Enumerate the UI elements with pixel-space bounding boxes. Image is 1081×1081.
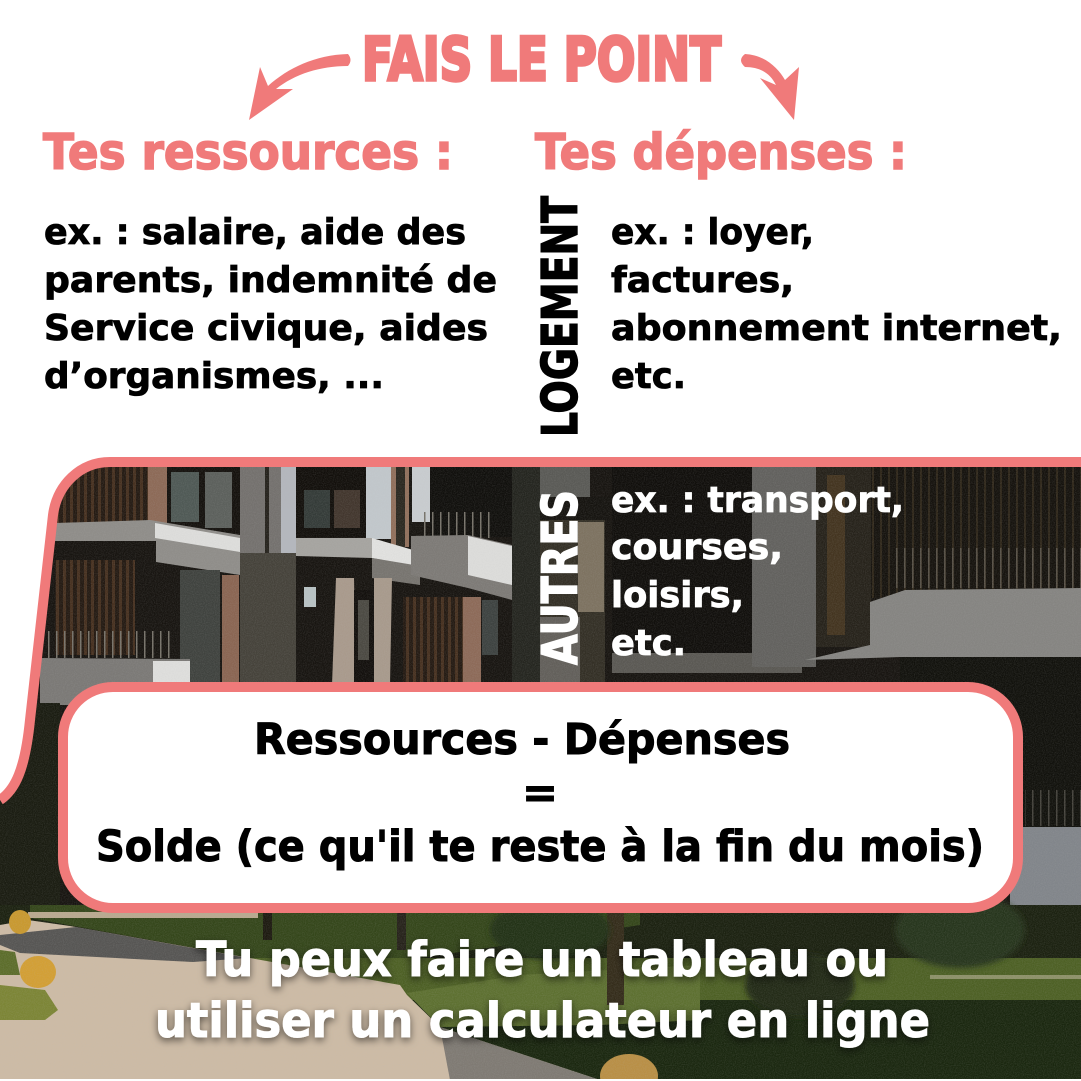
text block: housing examples: etc. xyxy=(611,356,686,397)
coral curved frame line above the photo xyxy=(0,462,1081,800)
text block: other expenses examples: etc. xyxy=(611,623,686,664)
heading: resources: Tes ressources : xyxy=(43,124,453,181)
left facade xyxy=(40,467,540,705)
closing text xyxy=(155,932,930,1049)
text block: resources examples: d’organismes, ... xyxy=(44,356,384,397)
background photo: apartment buildings and garden xyxy=(0,460,1081,1081)
text block: resources examples: ex. : salaire, aide des xyxy=(44,212,466,253)
equals sign: = xyxy=(522,768,558,818)
heading: expenses: Tes dépenses : xyxy=(535,124,907,181)
formula line 3: Solde (ce qu'il te reste à la fin du mois) xyxy=(96,822,984,872)
photo grain xyxy=(0,460,1081,1080)
right facade xyxy=(540,467,1081,907)
text block: other expenses examples: ex. : transport, xyxy=(611,480,904,521)
panel: balance formula xyxy=(63,687,1018,908)
closing text: utiliser un calculateur en ligne xyxy=(155,993,930,1049)
text block: resources examples: parents, indemnité de xyxy=(44,260,497,301)
text block: other expenses examples xyxy=(611,480,904,664)
arrow: to expenses xyxy=(741,54,799,120)
vertical label: logement: LOGEMENT xyxy=(532,196,589,437)
text block: other expenses examples: loisirs, xyxy=(611,575,744,616)
text block: housing examples: ex. : loyer, xyxy=(611,212,814,253)
title: FAIS LE POINT xyxy=(362,25,721,95)
formula line 1: Ressources - Dépenses xyxy=(254,715,790,765)
text block: other expenses examples: courses, xyxy=(611,527,783,568)
text block: resources examples xyxy=(44,212,497,397)
text block: housing examples xyxy=(611,212,1062,397)
arrow: to resources xyxy=(249,54,350,120)
vertical label: autres: AUTRES xyxy=(532,490,589,665)
text block: housing examples: abonnement internet, xyxy=(611,308,1062,349)
text block: resources examples: Service civique, aides xyxy=(44,308,488,349)
text block: housing examples: factures, xyxy=(611,260,794,301)
closing text: Tu peux faire un tableau ou xyxy=(196,932,888,988)
garden ground xyxy=(0,703,1081,1081)
